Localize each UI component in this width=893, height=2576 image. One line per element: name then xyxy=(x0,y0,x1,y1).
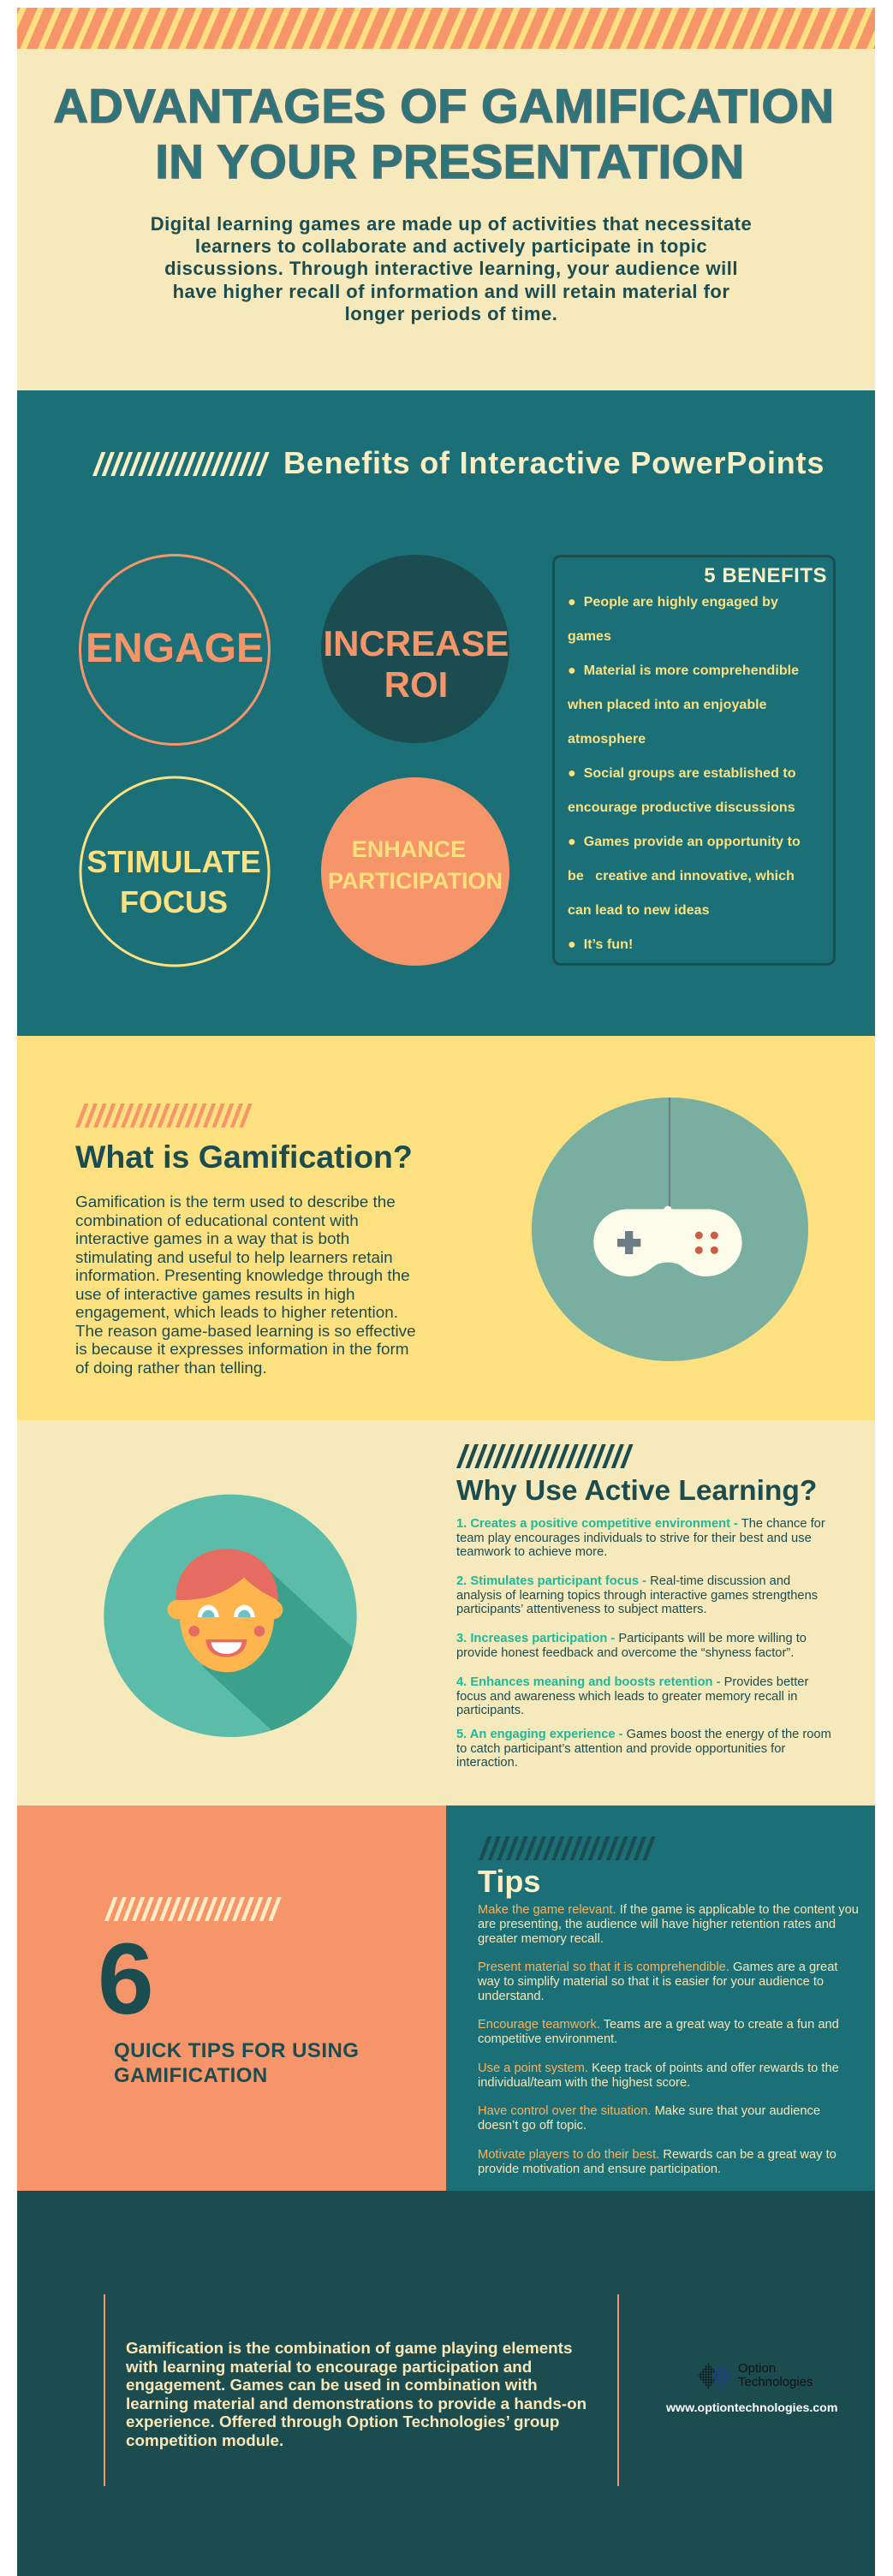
icon: game controller xyxy=(532,1098,808,1361)
tip 2: understand. xyxy=(478,1990,545,2003)
tip 3: competitive environment. xyxy=(478,2032,617,2046)
footer text: experience. Offered through Option Technologies’ group xyxy=(126,2412,559,2430)
reason 5: interaction. xyxy=(456,1756,518,1770)
logo: option technologies xyxy=(698,2361,813,2389)
reason 3 xyxy=(456,1632,807,1660)
heading: quick tips xyxy=(114,2039,359,2087)
panel: six quick tips xyxy=(17,1806,446,2191)
logo text xyxy=(738,2361,813,2389)
body: what is gamification: interactive games in a way that is both xyxy=(75,1230,349,1248)
intro text: discussions. Through interactive learning, your audience will xyxy=(164,258,738,279)
intro text: longer periods of time. xyxy=(345,303,557,324)
heading: what is gamification: What is Gamification? xyxy=(75,1139,413,1175)
intro text: have higher recall of information and will retain material for xyxy=(173,281,729,302)
icon: orange slashes xyxy=(75,1104,252,1127)
icon: cream slashes xyxy=(92,452,270,476)
circle: increase roi xyxy=(321,555,509,743)
body: what is gamification: combination of educational content with xyxy=(75,1212,359,1230)
circle: stimulate focus xyxy=(79,776,271,967)
website url: www.optiontechnologies.com xyxy=(666,2401,837,2415)
reason 3: 3. Increases participation - Participants will be more willing to xyxy=(456,1632,807,1645)
label: stimulate focus xyxy=(86,844,261,919)
reason 4 xyxy=(456,1675,808,1717)
title xyxy=(53,79,835,188)
big number 6: 6 xyxy=(98,1923,154,2036)
reason 2 xyxy=(456,1574,818,1616)
body: what is gamification xyxy=(75,1193,416,1377)
tip 3: Encourage teamwork. Teams are a great way to create a fun and xyxy=(478,2017,839,2031)
heading: benefits: Benefits of Interactive PowerPoints xyxy=(283,445,825,480)
intro text xyxy=(151,213,752,324)
reason 2: analysis of learning topics through interactive games strengthens xyxy=(456,1589,818,1603)
body: what is gamification: use of interactive games results in high xyxy=(75,1286,355,1304)
reason 3: provide honest feedback and overcome the “shyness factor”. xyxy=(456,1646,794,1660)
panel: footer xyxy=(17,2191,875,2576)
label: increase roi xyxy=(323,623,509,705)
heading: tips: Tips xyxy=(478,1864,540,1899)
footer text: competition module. xyxy=(126,2431,283,2449)
tip 5: Have control over the situation. Make sure that your audience xyxy=(478,2104,820,2118)
icon: logo diamonds xyxy=(698,2363,731,2389)
body: what is gamification: engagement, which leads to higher retention. xyxy=(75,1304,398,1322)
icon: smiling face xyxy=(104,1495,357,1737)
panel: why use active learning xyxy=(17,1420,875,1806)
footer text: engagement. Games can be used in combination with xyxy=(126,2376,538,2394)
footer rule right xyxy=(617,2294,619,2486)
label: stimulate focus: FOCUS xyxy=(120,884,228,919)
label: stimulate focus: STIMULATE xyxy=(86,844,261,879)
label: enhance participation: PARTICIPATION xyxy=(328,868,503,894)
tip 1: are presenting, the audience will have higher retention rates and xyxy=(478,1918,836,1931)
tip 1: greater memory recall. xyxy=(478,1931,604,1945)
icon: dark slashes xyxy=(456,1444,634,1468)
body: what is gamification: Gamification is the term used to describe the xyxy=(75,1193,396,1211)
label: enhance participation: ENHANCE xyxy=(352,836,466,862)
reason 2: 2. Stimulates participant focus - Real-time discussion and xyxy=(456,1574,790,1588)
tip 6: Motivate players to do their best. Rewards can be a great way to xyxy=(478,2147,836,2161)
body: what is gamification: of doing rather than telling. xyxy=(75,1359,267,1377)
tip 1 xyxy=(478,1902,859,1945)
intro text: learners to collaborate and actively participate in topic xyxy=(195,235,707,257)
title: IN YOUR PRESENTATION xyxy=(155,134,745,188)
benefit list: ● People are highly engaged by games ● Material is more comprehendible when placed into an enjoyable atmosphere ● Social groups are established to encourage productive discussions ● Games provide an opportunity to be creative and innovative, which can lead to new ideas ● It’s fun! xyxy=(568,595,801,952)
tip 2 xyxy=(478,1960,837,2003)
circle: enhance participation xyxy=(321,777,509,966)
tip 2: Present material so that it is comprehendible. Games are a great xyxy=(478,1960,837,1974)
footer text: learning material and demonstrations to provide a hands-on xyxy=(126,2395,586,2412)
footer rule left xyxy=(104,2294,105,2486)
tip 5: doesn’t go off topic. xyxy=(478,2118,586,2132)
footer text xyxy=(126,2339,586,2449)
heading: 5 benefits: 5 BENEFITS xyxy=(704,564,827,587)
body: what is gamification: The reason game-based learning is so effective xyxy=(75,1323,416,1341)
panel: tips xyxy=(446,1806,875,2191)
icon: dark slashes on teal xyxy=(479,1836,656,1860)
reason 1: 1. Creates a positive competitive environment - The chance for xyxy=(456,1517,825,1531)
logo text: Technologies xyxy=(738,2375,813,2389)
circle: engage xyxy=(79,554,271,746)
tip 2: way to simplify material so that it is easier for your audience to xyxy=(478,1974,824,1988)
reason 4: focus and awareness which leads to greater memory recall in xyxy=(456,1690,797,1704)
body: what is gamification: is because it expresses information in the form xyxy=(75,1341,409,1359)
logo text: Option xyxy=(738,2361,776,2376)
reason 5: 5. An engaging experience - Games boost the energy of the room xyxy=(456,1728,831,1741)
label: enhance participation xyxy=(328,836,503,894)
striped banner xyxy=(17,8,875,49)
intro text: Digital learning games are made up of activities that necessitate xyxy=(151,213,752,235)
heading: quick tips: GAMIFICATION xyxy=(114,2064,268,2087)
heading: why use active learning: Why Use Active Learning? xyxy=(456,1475,817,1507)
reason 5: to catch participant’s attention and provide opportunities for xyxy=(456,1742,785,1756)
reason 4: participants. xyxy=(456,1704,524,1717)
panel: benefits xyxy=(17,390,875,1036)
reason 4: 4. Enhances meaning and boosts retention - Provides better xyxy=(456,1675,808,1689)
panel: what is gamification xyxy=(17,1036,875,1420)
label: increase roi: INCREASE xyxy=(323,623,509,663)
tip 4 xyxy=(478,2061,839,2089)
panel: header xyxy=(17,8,875,390)
icon: cream slashes on orange xyxy=(104,1897,281,1921)
tip 6 xyxy=(478,2147,836,2176)
reason 2: participants’ attentiveness to subject matters. xyxy=(456,1603,707,1616)
tip 1: Make the game relevant. If the game is applicable to the content you xyxy=(478,1902,859,1916)
body: what is gamification: information. Presenting knowledge through the xyxy=(75,1267,410,1285)
tip 4: Use a point system. Keep track of points and offer rewards to the xyxy=(478,2061,839,2075)
tip 6: provide motivation and ensure participation. xyxy=(478,2163,721,2176)
title: ADVANTAGES OF GAMIFICATION xyxy=(53,79,835,132)
reason 1 xyxy=(456,1517,825,1559)
reason 5 xyxy=(456,1728,831,1770)
panel: 5 benefits box xyxy=(552,555,836,966)
reason 1: teamwork to achieve more. xyxy=(456,1545,607,1559)
tip 5 xyxy=(478,2104,820,2132)
footer text: Gamification is the combination of game playing elements xyxy=(126,2339,572,2357)
tip 4: individual/team with the highest score. xyxy=(478,2075,690,2089)
tip 3 xyxy=(478,2017,839,2046)
reason 1: team play encourages individuals to strive for their best and use xyxy=(456,1532,812,1545)
label: engage: ENGAGE xyxy=(86,626,264,671)
heading: quick tips: QUICK TIPS FOR USING xyxy=(114,2039,359,2062)
label: increase roi: ROI xyxy=(384,664,448,705)
footer text: with learning material to encourage participation and xyxy=(126,2358,532,2376)
body: what is gamification: stimulating and useful to help learners retain xyxy=(75,1249,393,1267)
